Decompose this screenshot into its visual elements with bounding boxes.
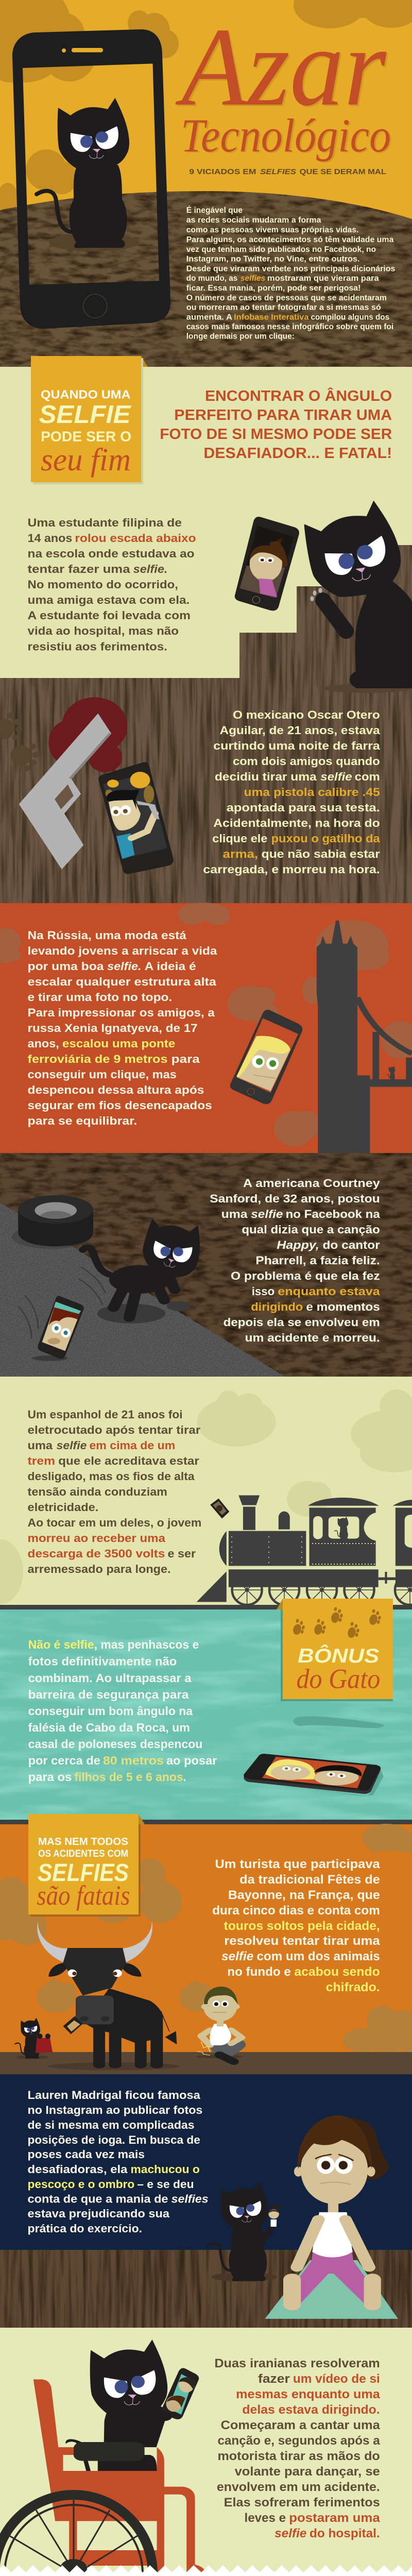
text: Filipina student: No momento do ocorrido, <box>28 578 178 591</box>
text: Spanish train: tensão ainda conduziam <box>28 1485 167 1498</box>
text: bull runner: Bayonne, na França, que <box>228 1889 380 1902</box>
clouds: bull <box>0 1824 412 2052</box>
text: yoga: desafiadoras, ela <box>28 2163 128 2176</box>
heading: PERFEITO PARA TIRAR UMA <box>174 406 392 423</box>
section banner: SELFIE <box>39 401 131 429</box>
bonus banner: do Gato <box>297 1664 380 1694</box>
title: Tecnológico <box>182 110 392 163</box>
text: Iranian women: leves e <box>244 2512 286 2525</box>
text: Russia: levando jovens a arriscar a vida <box>28 944 217 957</box>
text: bull runner: chifrado. <box>326 1981 380 1994</box>
intro text: Para alguns, os acontecimentos só têm validade uma <box>186 235 394 244</box>
text: Mexican pistol: Acidentalmente, na hora do <box>213 817 380 829</box>
text: Spanish train: em cima de um <box>89 1439 175 1452</box>
text: Filipina student <box>28 516 196 653</box>
title: Azar <box>175 5 387 129</box>
footer <box>0 2565 412 2576</box>
text: Russia: e tirar uma foto no topo. <box>28 991 172 1004</box>
text: Filipina student: Uma estudante filipina de <box>28 516 182 529</box>
heading: ENCONTRAR O ÂNGULO <box>205 386 392 404</box>
section: bonus water <box>0 1599 412 1820</box>
section banner <box>31 356 148 484</box>
section: yoga <box>0 2074 412 2328</box>
text: yoga: poses cada vez mais <box>28 2148 145 2161</box>
text: cliff couple: por cerca de <box>28 1754 100 1767</box>
text: Russia: Na Rússia, uma moda está <box>28 929 186 942</box>
heading: DESAFIADOR... E FATAL! <box>203 445 392 461</box>
text: Mexican pistol: puxou o gatilho da <box>271 832 380 845</box>
intro text: ou morreram ao tentar fotografar a si mesmas só <box>186 303 381 312</box>
text: Spanish train: eletrocutado após tentar tirar <box>28 1423 201 1436</box>
text: Mexican pistol <box>203 708 380 876</box>
text: Russia: Para impressionar os amigos, a <box>28 1006 215 1019</box>
title: Azar <box>177 7 388 131</box>
title: Tecnológico <box>181 109 391 162</box>
text: yoga: posições de ioga. Em busca de <box>28 2133 200 2146</box>
section: stairs and pistol background <box>0 356 412 903</box>
text: American driver: no Facebook na <box>286 1208 380 1221</box>
divider bar <box>0 1605 412 1609</box>
text: Mexican pistol: arma, <box>223 848 258 860</box>
text: cliff couple: combinam. Ao ultrapassar a <box>28 1671 192 1685</box>
section banner: seu fim <box>41 442 131 478</box>
text: Filipina student: uma amiga estava com ela. <box>28 594 190 606</box>
intro text: compilou alguns dos <box>311 313 389 321</box>
text: American driver: isso <box>252 1285 274 1298</box>
text: Filipina student: na escola onde estudava ao <box>28 547 195 560</box>
intro text: casos mais famosos nesse infográfico sobre quem foi <box>186 322 393 331</box>
text: Russia: ferroviária de 9 metros <box>28 1053 168 1065</box>
intro text: como as pessoas vivem suas próprias vidas. <box>186 225 358 234</box>
text: Mexican pistol: O mexicano Oscar Otero <box>233 708 380 721</box>
text: Filipina student: tentar fazer uma <box>28 563 130 575</box>
text: Spanish train: uma <box>28 1439 53 1452</box>
cat shadow <box>49 233 139 251</box>
text: cliff couple: para os <box>28 1770 72 1784</box>
text: Russia: russa Xenia Ignatyeva, de 17 <box>28 1022 198 1035</box>
black cat with cape <box>15 2018 53 2059</box>
heading <box>160 386 392 461</box>
intro text <box>186 205 395 341</box>
text: Iranian women: Duas iranianas resolveram <box>214 2357 380 2370</box>
text: bull runner: touros soltos pela cidade, <box>224 1920 380 1933</box>
wood floor <box>0 2250 412 2328</box>
text: American driver: selfie <box>251 1208 283 1221</box>
text: Iranian women: postaram uma <box>289 2512 380 2525</box>
text: Iranian women: motorista tirar as mãos do <box>217 2450 380 2463</box>
text: Spanish train: trem <box>28 1454 55 1467</box>
text: American driver: Pharrell, a fazia feliz. <box>255 1254 380 1267</box>
text: Russia: por uma boa <box>28 960 104 973</box>
section: train <box>0 1377 412 1605</box>
icon: floating phone <box>244 1716 384 1796</box>
text: American driver: dirigindo <box>251 1300 303 1313</box>
section banner: PODE SER O <box>41 429 131 445</box>
wheelchair <box>33 2379 204 2572</box>
clouds: Russia <box>0 903 412 1146</box>
small cat on bridge <box>387 1066 395 1079</box>
text: Filipina student: 14 anos <box>28 532 72 545</box>
text: American driver: e momentos <box>306 1300 380 1313</box>
seated man <box>196 1987 246 2062</box>
text: Filipina student: selfie. <box>133 563 168 575</box>
icon: phone with blonde selfie <box>230 1010 302 1104</box>
text: Russia: conseguir um clique, mas <box>28 1068 177 1081</box>
text: American driver: enquanto estava <box>278 1285 380 1298</box>
text: American driver: Happy, <box>277 1239 319 1251</box>
text: Spanish train: eletricidade. <box>28 1501 98 1514</box>
icon: pistol and blood <box>19 697 127 869</box>
subtitle: QUE SE DERAM MAL <box>300 168 386 176</box>
text: Mexican pistol: selfie <box>320 770 352 783</box>
intro text: selfies <box>241 274 265 283</box>
text: Spanish train: Ao tocar em um deles, o jovem <box>28 1516 201 1529</box>
text: cliff couple: barreira de segurança para <box>28 1688 189 1701</box>
clouds: train <box>0 1389 412 1604</box>
text: Spanish train: descarga de 3500 volts <box>28 1547 165 1560</box>
text: Filipina student: resistiu aos ferimentos. <box>28 640 167 653</box>
text: Mexican pistol: com <box>355 770 380 783</box>
text: Filipina student: rolou escada abaixo <box>75 532 196 545</box>
text: Iranian women: Elas sofreram ferimentos <box>224 2496 380 2510</box>
text: cliff couple <box>28 1638 217 1784</box>
black cat running <box>83 1211 209 1324</box>
text: bull runner: dura cinco dias e conta com <box>212 1904 380 1918</box>
text: Filipina student: A estudante foi levada com <box>28 609 191 622</box>
icon: phone with girl selfie <box>235 517 299 611</box>
text: American driver: A americana Courtney <box>243 1177 380 1190</box>
text: Iranian women: delas estava dirigindo. <box>242 2403 380 2417</box>
text: Russia <box>28 929 217 1127</box>
yoga woman <box>265 2115 398 2319</box>
text: Spanish train: arremessado para longe. <box>28 1563 171 1575</box>
icon: paw prints on banner <box>292 1606 383 1639</box>
text: Mexican pistol: decidiu tirar uma <box>215 770 317 783</box>
text: Iranian women: envolvem em um acidente. <box>217 2481 380 2494</box>
section: intro <box>0 0 412 367</box>
icon: phone with man selfie <box>98 762 174 874</box>
text: bull runner: no fundo e <box>227 1965 291 1979</box>
text: Filipina student: vida ao hospital, mas não <box>28 624 179 637</box>
black cat <box>37 98 129 248</box>
text: Mexican pistol: que não sabia estar <box>262 848 380 860</box>
text: cliff couple: fotos definitivamente não <box>28 1654 177 1668</box>
text: bull runner: da tradicional Fêtes de <box>239 1873 380 1887</box>
text: cliff couple: . <box>183 1770 186 1784</box>
text: Russia: para se equilibrar. <box>28 1114 137 1127</box>
text: yoga: machucou o <box>131 2163 200 2176</box>
text: Mexican pistol: uma pistola calibre .45 <box>244 786 380 799</box>
text: cliff couple: conseguir um bom ângulo na <box>28 1704 193 1718</box>
banner: not all fatal <box>28 1814 145 1917</box>
asphalt road <box>0 1202 285 1377</box>
text: yoga: conta de que a mania de <box>28 2192 168 2206</box>
text: Iranian women: canção e, segundos após a <box>217 2434 380 2448</box>
banner: not all fatal: MAS NEM TODOS <box>38 1837 128 1848</box>
text: yoga: – e se deu <box>137 2178 194 2191</box>
text: Iranian women: do hospital. <box>310 2527 380 2540</box>
text: Iranian women: mesmas enquanto uma <box>236 2388 380 2401</box>
text: cliff couple: , mas penhascos e <box>94 1638 199 1651</box>
text: American driver: uma <box>221 1208 248 1221</box>
text: cliff couple: filhos de 5 e 6 anos <box>74 1770 183 1784</box>
text: cliff couple: 80 metros <box>103 1754 164 1767</box>
text: Mexican pistol: apontada para sua testa. <box>227 801 380 814</box>
icon: tiny phone on train <box>210 1498 229 1519</box>
intro text: aumenta. A <box>186 313 232 321</box>
text: Iranian women: selfie <box>274 2527 307 2540</box>
text: Russia: segurar em fios desencapados <box>28 1099 212 1112</box>
intro text: mostraram que vieram para <box>267 274 380 283</box>
text: yoga <box>28 2089 209 2235</box>
text: Russia: escalou uma ponte <box>62 1037 176 1050</box>
text: cliff couple: Não é selfie <box>28 1638 94 1651</box>
wood stairs <box>0 545 412 903</box>
text: yoga: de si mesma em complicadas <box>28 2119 195 2131</box>
text: Russia: para <box>171 1053 200 1065</box>
intro text: vez que tenham sido publicados no Facebook, no <box>186 245 376 254</box>
black cat with selfie stick <box>207 2182 284 2281</box>
black cat on stairs <box>301 498 412 693</box>
text: Mexican pistol: Aguilar, de 21 anos, estava <box>220 724 380 737</box>
banner: not all fatal: são fatais <box>37 1880 130 1911</box>
icon: phone falling <box>32 1296 84 1361</box>
text: bull runner: acabou sendo <box>294 1965 380 1979</box>
text: cliff couple: casal de poloneses despencou <box>28 1737 202 1751</box>
section: Russia bridge <box>0 903 412 1153</box>
intro text: as redes sociais mudaram a forma <box>186 215 322 225</box>
banner: not all fatal: OS ACIDENTES COM <box>38 1849 128 1859</box>
text: yoga: estava prejudicando sua <box>28 2207 170 2220</box>
icon: phone frame <box>12 29 170 329</box>
text: Iranian women: fazer <box>258 2372 290 2386</box>
text: Spanish train: que ele acreditava estar <box>58 1454 199 1467</box>
text: American driver: do cantor <box>323 1239 380 1251</box>
text: Spanish train <box>28 1408 201 1575</box>
text: yoga: Lauren Madrigal ficou famosa <box>28 2089 201 2102</box>
text: Spanish train: Um espanhol de 21 anos foi <box>28 1408 183 1421</box>
text: American driver: Sanford, de 32 anos, postou <box>210 1192 380 1205</box>
bridge <box>317 921 412 1153</box>
intro text: Desde que viraram verbete nos principais dicionários <box>186 264 395 273</box>
text: yoga: prática do exercício. <box>28 2222 142 2235</box>
text: bull runner <box>212 1858 380 1994</box>
ground hill <box>0 191 412 367</box>
black cat in wheelchair <box>65 2340 199 2471</box>
text: Russia: selfie. <box>107 960 141 973</box>
text: bull runner: resolveu tentar tirar uma <box>224 1935 380 1948</box>
text: yoga: pescoço e o ombro <box>28 2178 134 2191</box>
text: Russia: escalar qualquer estrutura alta <box>28 975 216 988</box>
section banner: QUANDO UMA <box>41 387 131 401</box>
intro text: Instagram, no Twitter, no Vine, entre outros. <box>186 255 359 263</box>
text: bull runner: com um dos animais <box>256 1950 380 1963</box>
intro text: Infobase Interativa <box>234 313 310 321</box>
text: Mexican pistol: carregada, e morreu na hora. <box>203 863 380 876</box>
text: yoga: selfies <box>171 2192 209 2206</box>
text: Spanish train: desligado, mas os fios de alta <box>28 1470 195 1483</box>
subtitle <box>189 168 386 176</box>
text: Spanish train: selfie <box>57 1439 87 1452</box>
text: bull runner: Um turista que participava <box>215 1858 380 1871</box>
subtitle: 9 VICIADOS EM <box>189 168 256 176</box>
text: Iranian women <box>214 2357 380 2540</box>
divider bar <box>0 1820 412 1824</box>
text: Russia: anos, <box>28 1037 59 1050</box>
bull <box>37 1921 180 2070</box>
icon: paw prints <box>0 713 39 771</box>
section: wheelchair <box>0 2328 412 2576</box>
text: Iranian women: Começaram a cantar uma <box>221 2419 380 2432</box>
text: cliff couple: falésia de Cabo da Roca, um <box>28 1721 190 1734</box>
intro text: É inegável que <box>186 205 243 215</box>
wheel <box>0 2495 152 2576</box>
text: Iranian women: volante para dançar, se <box>235 2465 380 2479</box>
intro text: longe demais por um clique: <box>186 332 295 341</box>
text: Mexican pistol: com dois amigos quando <box>233 755 380 768</box>
text: yoga: no Instagram ao publicar fotos <box>28 2104 202 2116</box>
text: Russia: despencou dessa altura após <box>28 1083 204 1096</box>
text: American driver: O problema é que ela fez <box>231 1269 380 1282</box>
intro text: ficar. Essa mania, porém, pode ser perigosa! <box>186 283 361 293</box>
icon: tire <box>12 1195 93 1249</box>
bonus banner: BÔNUS <box>298 1643 380 1667</box>
clouds: intro sky <box>0 0 412 214</box>
section: driving crash <box>0 1153 412 1377</box>
motion lines <box>19 1267 105 1338</box>
heading: FOTO DE SI MESMO PODE SER <box>160 426 392 442</box>
text: American driver <box>210 1177 380 1344</box>
section: bull <box>0 1814 412 2074</box>
text: Mexican pistol: clique ele <box>212 832 268 845</box>
text: Spanish train: morreu ao receber uma <box>28 1532 165 1545</box>
text: Russia: A ideia é <box>145 960 196 973</box>
text: bull runner: selfie <box>221 1950 254 1963</box>
banner: not all fatal: SELFIES <box>38 1859 129 1887</box>
text: cliff couple: ao posar <box>166 1754 217 1767</box>
text: Iranian women: um vídeo de si <box>293 2372 380 2386</box>
bonus banner <box>277 1599 393 1701</box>
text: American driver: depois ela se envolveu em <box>224 1316 380 1329</box>
intro text: do mundo, as <box>186 274 237 283</box>
ground <box>0 2052 412 2074</box>
text: Spanish train: e ser <box>168 1547 196 1560</box>
train <box>197 1495 412 1605</box>
text: American driver: um acidente e morreu. <box>245 1331 380 1344</box>
text: Mexican pistol: curtindo uma noite de farra <box>213 739 380 752</box>
text: American driver: qual dizia que a canção <box>242 1223 380 1236</box>
subtitle: SELFIES <box>260 168 296 176</box>
intro text: O número de casos de pessoas que se acidentaram <box>186 293 387 302</box>
